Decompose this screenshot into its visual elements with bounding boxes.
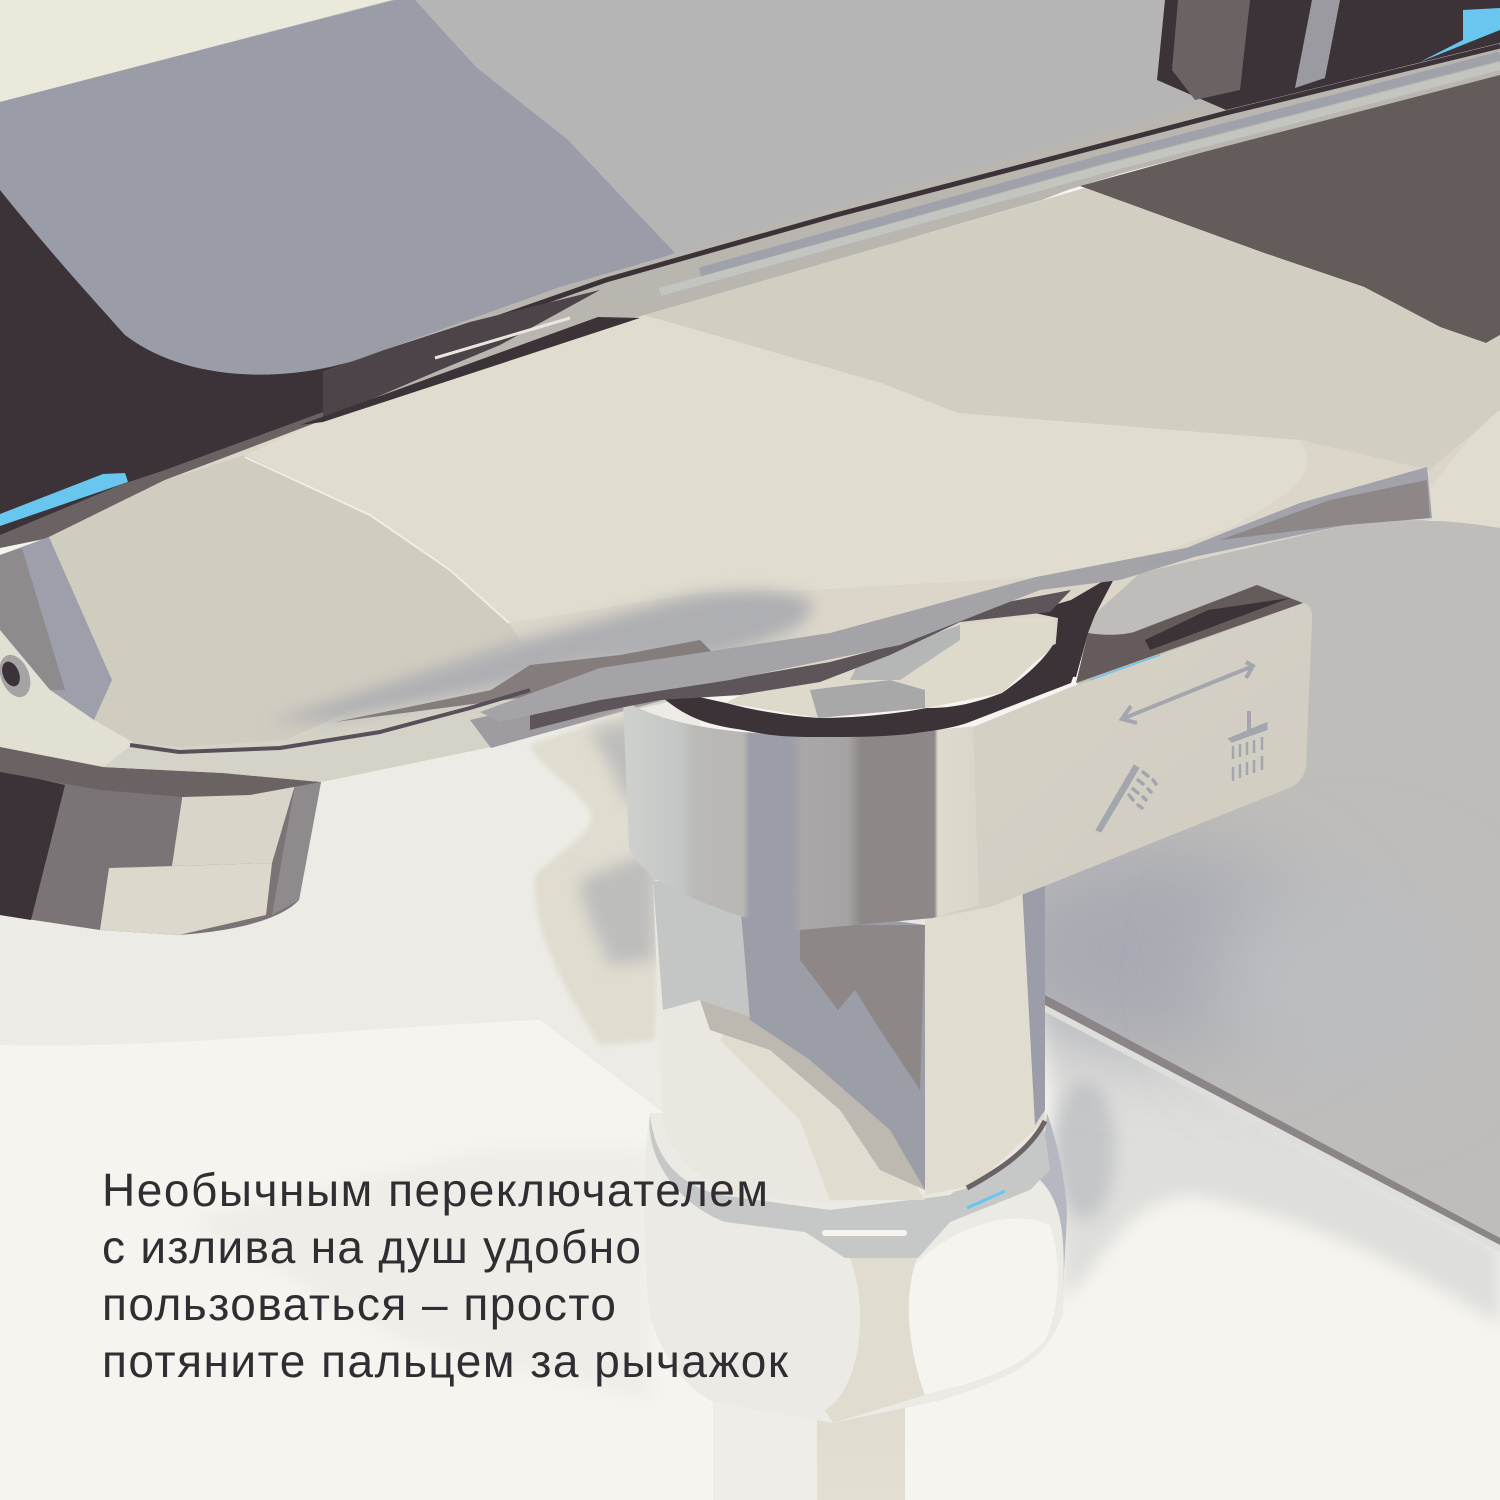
caption text: потяните пальцем за рычажок [102,1335,789,1387]
sink: upper shaded surface [0,700,700,1140]
tap spout: dark underside [0,190,420,545]
spout band: base [323,43,1500,420]
left foot of tap [0,770,321,935]
pillar stem: left light-grey [653,880,760,1020]
tap spout: blue glint [0,473,128,526]
left foot: right chrome [272,782,321,915]
lever: blue edge [1090,655,1160,680]
lower nut: dark glint [967,1121,1045,1188]
pillar stem: blue-grey mass [740,900,925,1190]
top right fixture: taupe strip [1172,0,1250,100]
caption text: с излива на душ удобно [102,1221,641,1273]
lower nut: grey groove [650,1115,1050,1258]
tap body: left darker facet [49,455,522,747]
caption text: Необычным переключателем [102,1164,768,1216]
tap body: taupe reflection [335,640,720,722]
grey block behind the lever [1045,520,1500,1245]
tap body: lower left cream [0,630,300,775]
lever: top dark surface [1076,585,1303,683]
lower nut: right lobe [908,1218,1058,1395]
lever: top darkest strip [1145,598,1290,650]
tap body: screw centre [0,659,23,689]
tap body: cream silhouette [0,188,1500,795]
sink: soft reflection under text [190,1150,650,1400]
wall: blue-grey reflection [0,0,675,375]
counter: blue-grey centre [1055,1080,1115,1220]
left foot: cream box [100,863,272,935]
tap spout: taupe underside strip [0,412,323,548]
lower nut: rim shade [1040,1113,1067,1290]
lower nut [644,1113,1067,1423]
shadow under spout [1080,70,1500,345]
lower nut: glint highlight [822,1230,907,1236]
grey block: bottom edge [1045,995,1500,1250]
tap body: seam grey band [470,665,700,748]
pillar stem: right cream [925,880,1045,1195]
grey block: blue tone [990,850,1330,1050]
lever [933,603,1312,918]
icon: hand shower [1096,765,1156,832]
chrome band: lower sweep [480,533,1272,722]
tap body: braided seam [130,690,530,752]
pillar stem: taupe sweep [700,1000,925,1190]
tap body: screw [0,650,36,702]
caption text: пользоваться – просто [102,1278,616,1330]
pillar stem: light beige sweep [720,1010,925,1200]
tap body: under edge light band [103,665,700,782]
left foot: dark part [0,770,65,920]
pillar stem: right blue edge [1022,880,1045,1125]
grey block: blue tone lower right [1210,870,1470,1090]
tap body: grey reflection [268,591,811,723]
lower pipe centre [817,1400,905,1500]
spout band: blue-grey stripe [700,56,1500,272]
spout band: white glint [435,318,570,358]
sink shadow: grey core [580,720,655,965]
wall: cream corner [0,0,392,102]
tap body: darker upper right [644,188,1500,470]
spout band: lower dark wedge [300,317,640,425]
tap body: white crease [245,457,509,623]
spout band: left dark flare [323,290,600,420]
collar rim: dark [663,633,1088,737]
top right fixture: grey strip [1295,0,1340,88]
lower nut: centre reflection [825,1258,925,1423]
wall: grey upper area [0,0,1500,520]
lower nut: blue glint [967,1191,1005,1208]
tap body: lighter centre [245,315,1307,623]
collar [623,700,985,930]
left foot: upper highlight [172,785,295,866]
lower pipe left [713,1400,817,1500]
spout band: pale stripe [660,66,1500,292]
top right fixture: blue glint [1420,8,1500,62]
tap body: right cream end [1430,410,1500,530]
pillar stem [653,880,1045,1202]
lower right cover over blur [1045,1005,1500,1252]
tap body: under edge taupe [0,747,321,797]
tap body: left chrome strip [0,537,112,720]
counter below the block [1047,1005,1500,1325]
icon: double arrow [1122,662,1253,723]
chrome struts: lower dark sweep [530,590,1071,730]
tap body: left chrome dark strip [0,548,65,690]
sink shadow left of pillar [530,710,660,1045]
chrome struts: dark [1030,573,1117,677]
caption text [102,1164,789,1387]
valve opening [726,617,1055,718]
valve opening: grey reflection [810,680,925,718]
chrome band: upper right taupe [1220,480,1430,540]
pillar stem: brown mass [800,925,925,1090]
icon: overhead shower [1230,711,1266,781]
chrome band: upper right [1132,467,1432,570]
top right fixture [1157,0,1500,110]
valve opening: light grey [850,625,960,680]
lower pipe right [905,1400,993,1500]
spout band: dark stripe [400,46,1500,352]
